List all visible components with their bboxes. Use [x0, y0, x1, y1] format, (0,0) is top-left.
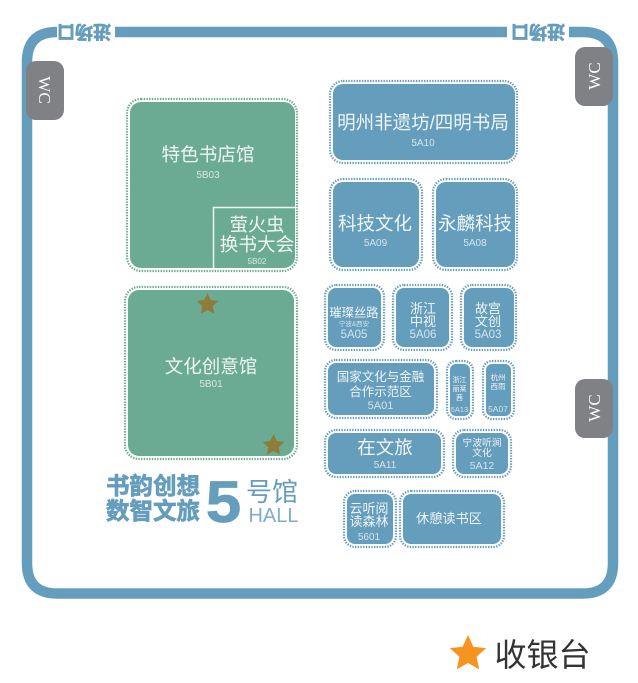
- panel: 5A07: 西雨: [490, 382, 506, 391]
- entrance label right: 进场口: [511, 22, 565, 42]
- panel: 5A11: [325, 430, 444, 477]
- panel: rest reading area: 休憩读书区: [416, 510, 482, 526]
- panel: 5A07: 5A07: [488, 404, 508, 414]
- panel: 5A13: 茜: [456, 393, 463, 402]
- WC right lower: [575, 379, 613, 438]
- panel: 5A06: 浙江: [410, 301, 436, 316]
- panel: 5B03: 特色书店馆: [162, 144, 254, 165]
- panel: 5A09: [330, 179, 422, 270]
- panel: 5A05: 5A05: [341, 329, 367, 341]
- WC right lower: WC: [585, 394, 604, 422]
- panel: 5B01: [125, 287, 297, 459]
- panel: 5A10: 5A10: [411, 138, 435, 149]
- panel: 5A09: 5A09: [364, 238, 388, 249]
- panel: rest reading area: [400, 491, 504, 547]
- WC right top: [575, 47, 613, 106]
- panel: 5B03: 萤火虫: [230, 214, 284, 235]
- panel: 5A11: 在文旅: [357, 437, 413, 458]
- panel: 5A05: 璀璨丝路: [329, 305, 379, 320]
- panel: 5A08: 5A08: [463, 238, 487, 249]
- panel: 5A01: 合作示范区: [349, 384, 412, 399]
- panel: 5601: 云听阅: [349, 501, 389, 516]
- panel: 5A08: [433, 179, 517, 270]
- WC right top: WC: [585, 62, 604, 90]
- panel: 5B03: 5B02: [248, 257, 267, 266]
- panel: 5A13: 浙江: [452, 375, 466, 384]
- icon: star cashier bottom: [263, 434, 284, 455]
- panel: 5A12: 宁波听涧: [462, 436, 502, 449]
- panel: 5A03: [461, 285, 516, 350]
- WC left: [26, 61, 64, 120]
- panel: 5A06: 5A06: [410, 329, 436, 341]
- panel: 5B01: 5B01: [199, 379, 223, 390]
- panel: 5A05: 宁波&西安: [339, 319, 370, 328]
- panel: 5A09: 科技文化: [338, 213, 412, 234]
- panel: 5A01: 国家文化与金融: [337, 369, 425, 384]
- panel: 5601: [344, 491, 396, 547]
- panel: 5A10: [330, 81, 517, 163]
- title: hall theme: 数智文旅: [106, 497, 200, 524]
- panel: 5601: 读森林: [349, 514, 389, 529]
- panel: 5B01: 文化创意馆: [165, 356, 257, 377]
- title: hall label: 号馆: [246, 477, 298, 507]
- title: hall label: HALL: [248, 505, 299, 527]
- legend: cashier: 收银台: [494, 637, 591, 673]
- panel: 5A01: 5A01: [368, 400, 393, 412]
- title: hall theme: [106, 472, 200, 524]
- hall outer wall: [27, 32, 613, 594]
- title: hall number: 5: [206, 470, 241, 534]
- panel: 5A12: 文化: [472, 446, 492, 459]
- panel: 5A13: [447, 361, 473, 419]
- legend: cashier: [450, 635, 591, 673]
- panel: 5B03: 换书大会: [220, 234, 294, 255]
- panel: 5A13: 5A13: [451, 405, 468, 414]
- panel: 5601: 5601: [358, 532, 381, 543]
- title: hall label: [246, 477, 299, 527]
- panel: 5A03: 5A03: [475, 329, 501, 341]
- panel: 5B03: 5B03: [196, 170, 220, 181]
- panel: 5B03: [127, 99, 297, 271]
- panel: 5A10: 明州非遗坊/四明书局: [337, 112, 509, 133]
- panel: 5A12: [453, 430, 511, 477]
- title: hall theme: 书韵创想: [106, 472, 200, 499]
- panel: 5A07: 杭州: [490, 372, 506, 382]
- panel: 5A06: 中视: [410, 314, 436, 329]
- panel: 5A12: 5A12: [470, 460, 494, 472]
- panel: 5A01: [325, 360, 437, 418]
- panel: 5A03: 故宫: [475, 301, 501, 316]
- icon: star cashier top: [197, 293, 218, 314]
- panel: 5A08: 永麟科技: [438, 213, 512, 234]
- panel: 5A05: [325, 285, 384, 350]
- entrance label left: 进场口: [57, 22, 111, 42]
- panel: 5A07: [483, 361, 514, 419]
- panel: 5A03: 文创: [475, 314, 501, 329]
- panel: 5A11: 5A11: [374, 460, 397, 471]
- WC left: WC: [35, 76, 54, 104]
- panel: 5A13: 丽莱: [452, 384, 466, 393]
- panel: 5A06: [393, 285, 452, 350]
